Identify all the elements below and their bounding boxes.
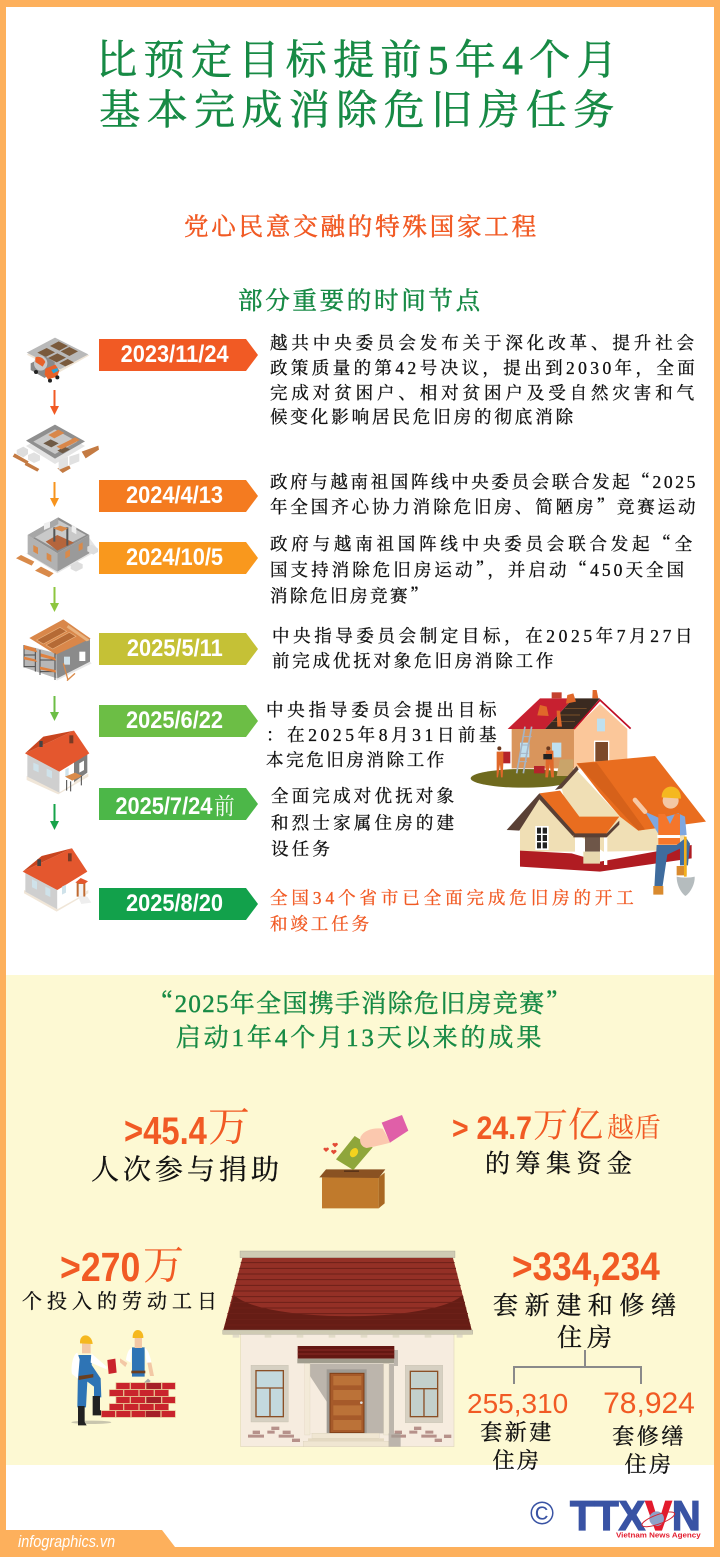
icon: hand dropping money in donation box (319, 1115, 408, 1208)
illustration: orange-roof house with worker (507, 756, 706, 896)
date tag 2024/4/13 (99, 480, 258, 512)
date tag 2025/6/22 (99, 705, 258, 737)
logo: TTXVN: © (530, 1494, 554, 1531)
stat: houses number: >334,234 (512, 1245, 660, 1289)
text: 2024/4/13 event (270, 469, 698, 519)
text: 2025/8/20 event: 和竣工任务 (270, 914, 372, 934)
illustration: workers on red-roof house (471, 690, 631, 788)
logo: TTXVN: TTXVN (570, 1492, 701, 1539)
stat: funds number (452, 1106, 661, 1146)
date tag 2023/11/24 (99, 339, 258, 371)
stat: new houses (467, 1388, 568, 1473)
date tag 2025/8/20: 2025/8/20 (126, 890, 223, 917)
beige results section background (6, 975, 714, 1465)
timeline heading: 部分重要的时间节点 (238, 288, 483, 315)
text: 2025/7/24 event: 设任务 (271, 839, 333, 859)
bracket connector (514, 1350, 641, 1384)
text: 2023/11/24 event (270, 333, 698, 427)
text: 2023/11/24 event: 越共中央委员会发布关于深化改革、提升社会 (270, 333, 698, 353)
stat: funds number: > 24.7 (452, 1110, 532, 1146)
text: 2023/11/24 event: 候变化影响居民危旧房的彻底消除 (270, 407, 576, 427)
stat: houses label: 住房 (557, 1325, 617, 1352)
icon: house with roof framing and scaffold (24, 619, 92, 681)
stat: donors number: >45.4 (124, 1110, 207, 1152)
illustration: house with brown roof (223, 1251, 473, 1447)
date tag 2025/7/24: 2025/7/24前 (115, 788, 234, 821)
stat: new houses: 套新建 (480, 1420, 554, 1445)
date tag 2025/8/20 (99, 888, 258, 920)
text: 2025/5/11 event (272, 626, 696, 671)
icon: red-roof house with scaffold deck (25, 731, 89, 794)
results heading (148, 984, 572, 1052)
stat: renovated houses: 住房 (624, 1452, 674, 1477)
stat: labor days number: 万 (143, 1242, 184, 1288)
text: 2024/4/13 event: 年全国齐心协力消除危旧房、简陋房”竞赛运动 (270, 494, 698, 519)
date tag 2024/10/5 (99, 542, 258, 574)
date tag 2025/5/11 (99, 633, 258, 665)
stat: new houses: 住房 (492, 1448, 542, 1473)
stat: houses label: 套新建和修缮 (493, 1293, 683, 1320)
stat: labor days label: 个投入的劳动工日 (22, 1291, 222, 1313)
illustration: two builders and brick wall (71, 1330, 175, 1425)
text: 2025/8/20 event (270, 888, 638, 934)
icon: foundation with concrete truck (27, 338, 89, 383)
date tag 2025/6/22: 2025/6/22 (126, 707, 223, 734)
title: 比预定目标提前5年4个月 (96, 37, 624, 83)
text: 2025/6/22 event: 中央指导委员会提出目标 (266, 700, 500, 720)
stat: funds number: 万亿 (533, 1106, 603, 1145)
stat: renovated houses (603, 1387, 695, 1477)
date tag 2025/5/11: 2025/5/11 (127, 635, 222, 662)
text: 2025/5/11 event: 中央指导委员会制定目标，在2025年7月27日 (272, 626, 696, 646)
title: 基本完成消除危旧房任务 (99, 87, 621, 133)
results heading: 启动1年4个月13天以来的成果 (176, 1025, 544, 1052)
text: 2025/8/20 event: 全国34个省市已全面完成危旧房的开工 (270, 888, 638, 908)
text: 2025/6/22 event (266, 700, 500, 770)
text: 2025/7/24 event: 和烈士家属住房的建 (271, 812, 457, 832)
stat: donors label: 人次参与捐助 (91, 1155, 283, 1186)
text: 2025/5/11 event: 前完成优抚对象危旧房消除工作 (272, 651, 556, 671)
text: 2023/11/24 event: 完成对贫困户、相对贫困户及受自然灾害和气 (270, 383, 698, 403)
date tag 2023/11/24: 2023/11/24 (121, 341, 228, 368)
icon: grey walls under construction (16, 517, 98, 577)
stat: funds label: 的筹集资金 (485, 1151, 638, 1178)
text: 2025/7/24 event (271, 786, 457, 859)
icon: foundation with walls and pallets (13, 425, 99, 473)
title (96, 37, 624, 133)
stat: renovated houses: 78,924 (603, 1387, 695, 1420)
stat: labor days number (60, 1242, 184, 1290)
text: 2024/10/5 event: 政府与越南祖国阵线中央委员会联合发起“全 (270, 531, 696, 556)
stat: labor days number: >270 (60, 1244, 140, 1290)
text: 2024/4/13 event: 政府与越南祖国阵线中央委员会联合发起“2025 (270, 469, 698, 494)
text: 2024/10/5 event: 消除危旧房竞赛” (270, 583, 430, 608)
stat: new houses: 255,310 (467, 1388, 568, 1419)
date tag 2024/10/5: 2024/10/5 (126, 544, 223, 571)
text: 2025/6/22 event: ：在2025年8月31日前基 (266, 725, 500, 745)
text: 2023/11/24 event: 政策质量的第42号决议，提出到2030年，全面 (270, 358, 698, 378)
subtitle: 党心民意交融的特殊国家工程 (184, 214, 539, 241)
icon: finished red-roof house (23, 848, 91, 912)
stat: renovated houses: 套修缮 (612, 1424, 686, 1449)
date tag 2024/4/13: 2024/4/13 (126, 482, 223, 509)
footer source text: infographics.vn (18, 1532, 115, 1551)
stat: donors number (124, 1105, 250, 1152)
logo: TTXVN: Vietnam News Agency (616, 1532, 701, 1539)
results heading: “2025年全国携手消除危旧房竞赛” (148, 984, 572, 1020)
text: 2024/10/5 event: 国支持消除危旧房运动”，并启动“450天全国 (270, 557, 687, 582)
text: 2025/7/24 event: 全面完成对优抚对象 (271, 786, 457, 806)
text: 2025/6/22 event: 本完危旧房消除工作 (266, 750, 447, 770)
text: 2024/10/5 event (270, 531, 696, 608)
stat: donors number: 万 (208, 1105, 250, 1151)
stat: houses label (493, 1292, 683, 1352)
stat: funds number: 越盾 (607, 1113, 661, 1143)
